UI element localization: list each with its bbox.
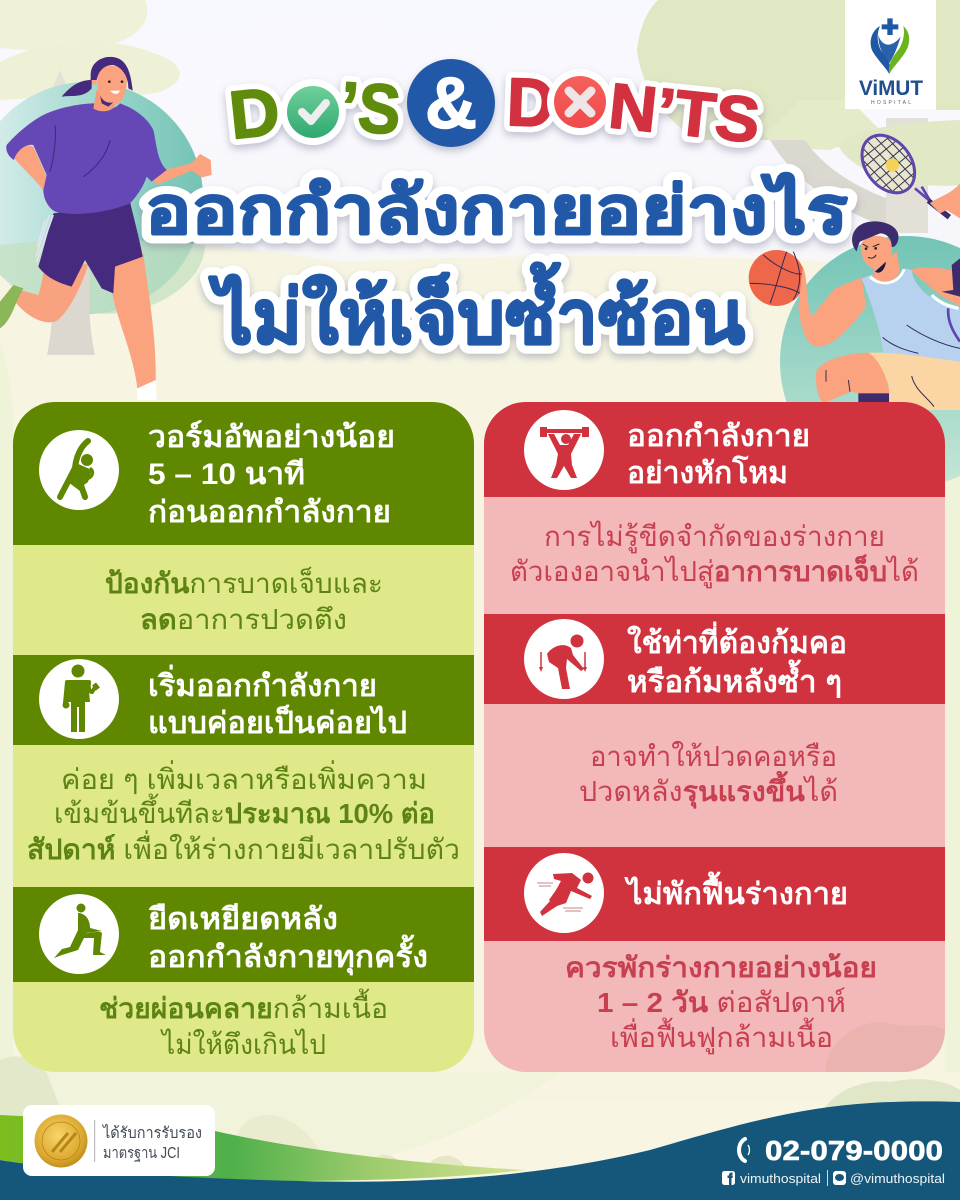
- shorts: [38, 202, 143, 293]
- ampersand badge: [407, 59, 495, 147]
- contact details: vimuthospital: [740, 1172, 821, 1186]
- front leg: [88, 253, 156, 388]
- runner woman illustration: [0, 57, 212, 400]
- do's heading: ’S: [338, 67, 403, 149]
- item: warm up: ลดอาการปวดตึง: [140, 604, 347, 635]
- item: no recovery: 1 – 2 วัน ต่อสัปดาห์: [597, 987, 846, 1018]
- icon: gold seal: [34, 1114, 88, 1168]
- item: warm up: [39, 420, 395, 635]
- back leg: [15, 263, 88, 322]
- main title in Thai: [145, 172, 848, 359]
- don'ts heading: D: [505, 64, 556, 142]
- icon: facebook: [722, 1171, 735, 1185]
- JCI accreditation card: [23, 1105, 215, 1176]
- item: gradual start: ค่อย ๆ เพิ่มเวลาหรือเพิ่มความ: [61, 760, 427, 795]
- main title in Thai: ไม่ให้เจ็บซ้ำซ้อน: [208, 262, 745, 359]
- do's heading: D: [226, 73, 283, 154]
- item: stretch: ไม่ให้ตึงเกินไป: [160, 1028, 326, 1060]
- item: stretch: [39, 894, 428, 1060]
- far shoulder: [910, 268, 960, 307]
- item: bad posture: ปวดหลังรุนแรงขึ้นได้: [579, 770, 838, 809]
- second arm dark gear: [942, 258, 960, 297]
- shirt: [6, 103, 167, 214]
- don'ts heading: N’TS: [606, 69, 763, 157]
- item: stretch: ยืดเหยียดหลัง: [148, 903, 338, 936]
- JCI accreditation card: ได้รับการรับรอง: [101, 1124, 202, 1142]
- item: no recovery: [524, 853, 877, 1055]
- item: warm up: ก่อนออกกำลังกาย: [148, 496, 391, 529]
- contact details: [722, 1135, 945, 1186]
- do's heading: D: [226, 73, 283, 154]
- item: warm up: วอร์มอัพอย่างน้อย: [148, 420, 395, 454]
- contact details: @vimuthospital: [850, 1172, 945, 1186]
- contact details: 02-079-0000: [765, 1135, 943, 1166]
- shoe: [0, 285, 23, 328]
- don'ts heading: N’TS: [606, 69, 763, 157]
- far hand: [930, 183, 960, 218]
- item: gradual start: [27, 659, 460, 865]
- item: overtraining: ออกกำลังกาย: [627, 420, 810, 453]
- icon: cross: [554, 76, 606, 128]
- left forearm: [13, 145, 67, 199]
- item: no recovery: ควรพักร่างกายอย่างน้อย: [565, 952, 877, 983]
- icon: weightlifter: [524, 410, 604, 490]
- icon: bent person: [524, 619, 604, 699]
- item: no recovery: เพื่อฟื้นฟูกล้ามเนื้อ: [610, 1017, 833, 1055]
- item: overtraining: อย่างหักโหม: [627, 454, 788, 490]
- icon: check: [287, 86, 339, 138]
- icon: line: [833, 1171, 846, 1185]
- icon: lunge: [39, 894, 119, 974]
- item: bad posture: อาจทำให้ปวดคอหรือ: [590, 740, 837, 772]
- item: overtraining: [510, 410, 919, 589]
- panel: don'ts: [484, 402, 945, 1072]
- logo: ViMUT Hospital: [845, 0, 936, 109]
- sock: [137, 380, 157, 400]
- do's heading: ’S: [338, 67, 403, 149]
- item: overtraining: การไม่รู้ขีดจำกัดของร่างกาย: [544, 521, 885, 554]
- basketball man illustration: [749, 123, 960, 488]
- item: gradual start: เริ่มออกกำลังกาย: [148, 664, 377, 703]
- main title in Thai: ออกกำลังกายอย่างไร: [145, 172, 848, 247]
- panel: do's: [13, 402, 474, 1072]
- item: gradual start: เข้มข้นขึ้นทีละประมาณ 10% ต่อ: [54, 793, 435, 829]
- main title in Thai: ไม่ให้เจ็บซ้ำซ้อน: [208, 262, 745, 359]
- knee and thigh: [816, 353, 889, 403]
- ball: [749, 250, 805, 306]
- icon: sprinter: [524, 853, 604, 933]
- icon: person with dumbbell: [39, 659, 119, 739]
- main title in Thai: ออกกำลังกายอย่างไร: [145, 172, 848, 247]
- item: gradual start: แบบค่อยเป็นค่อยไป: [148, 704, 407, 740]
- neck and head: [93, 90, 115, 111]
- JCI accreditation card: มาตรฐาน JCI: [103, 1145, 180, 1162]
- item: gradual start: สัปดาห์ เพื่อให้ร่างกายมีเวลาปรับตัว: [27, 830, 460, 865]
- icon: heart pin: [871, 18, 909, 74]
- footer waves: [0, 1101, 960, 1200]
- near arm: [798, 267, 866, 347]
- item: stretch: ออกกำลังกายทุกครั้ง: [148, 934, 428, 976]
- title: Do's and Don'ts: [226, 59, 763, 157]
- tennis racket: [860, 134, 951, 220]
- logo wordmark: ViMUT: [859, 77, 923, 100]
- item: stretch: ช่วยผ่อนคลายกล้ามเนื้อ: [99, 988, 388, 1024]
- don'ts heading: [505, 64, 763, 157]
- icon: phone: [739, 1139, 750, 1161]
- ampersand badge: &: [425, 64, 477, 144]
- shorts: [868, 353, 960, 410]
- logo subtext: HOSPITAL: [871, 100, 911, 106]
- item: overtraining: ตัวเองอาจนำไปสู่อาการบาดเจ็บได้: [510, 554, 919, 589]
- don'ts heading: D: [505, 64, 556, 142]
- item: bad posture: [524, 619, 847, 809]
- item: no recovery: ไม่พักฟื้นร่างกาย: [624, 871, 848, 911]
- item: warm up: ป้องกันการบาดเจ็บและ: [105, 566, 383, 599]
- neck and head: [873, 252, 900, 282]
- item: bad posture: ใช้ท่าที่ต้องก้มคอ: [627, 621, 847, 660]
- right forearm: [150, 154, 212, 185]
- item: warm up: 5 – 10 นาที: [148, 458, 305, 491]
- do's heading: [226, 67, 403, 154]
- item: bad posture: หรือก้มหลังซ้ำ ๆ: [627, 659, 842, 699]
- vest: [862, 268, 960, 362]
- icon: side stretch: [39, 430, 119, 510]
- hair: [91, 57, 133, 107]
